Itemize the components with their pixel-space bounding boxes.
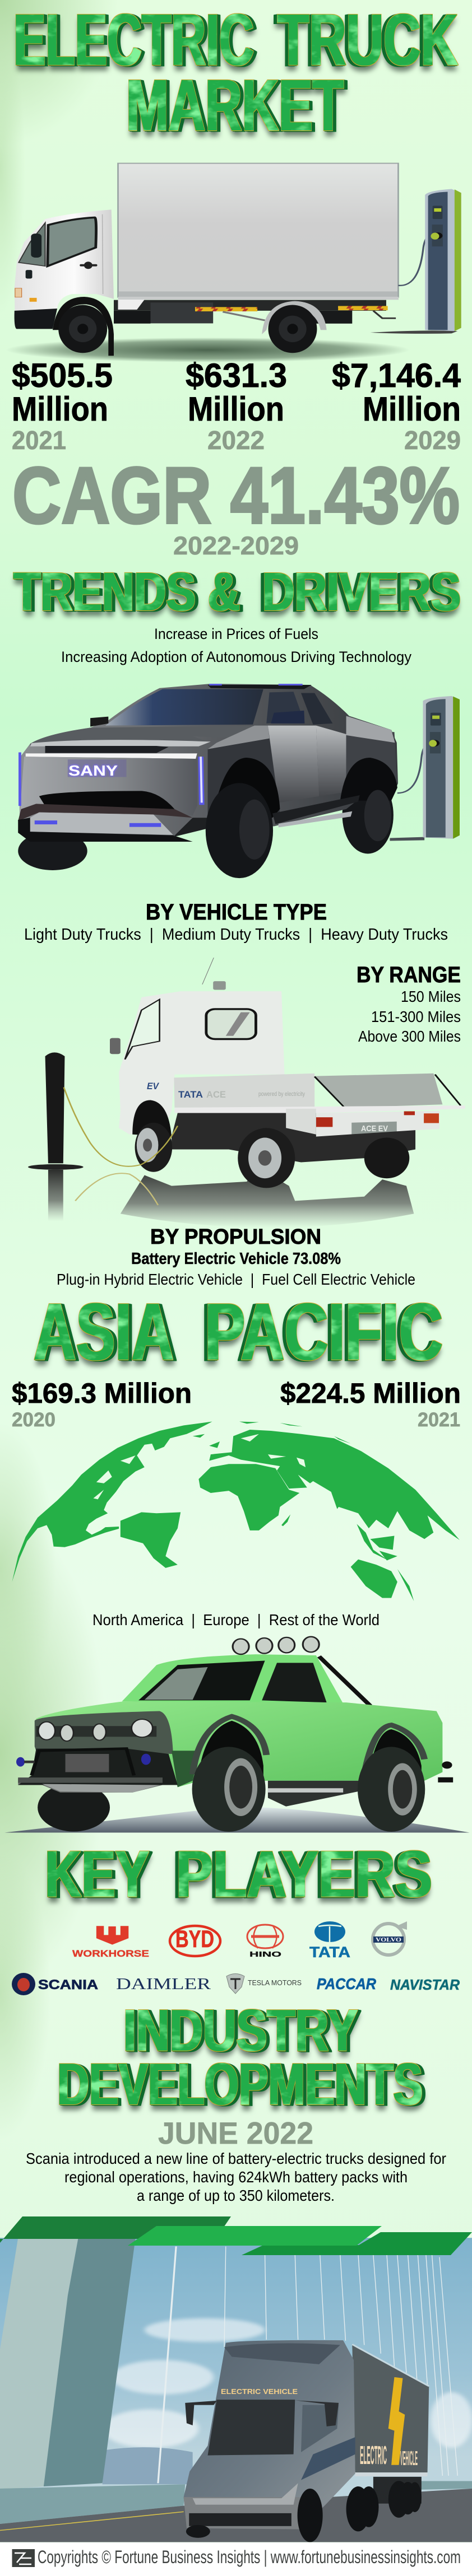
stat: 2021 market size: Million (12, 390, 108, 428)
stat: asia pacific 2020 (12, 1378, 192, 1431)
logo: Navistar: NAVISTAR (390, 1976, 460, 1993)
segment: by propulsion: Plug-in Hybrid Electric Vehicle | Fuel Cell Electric Vehicle (57, 1271, 415, 1288)
logo: Tata: TATA (309, 1944, 350, 1961)
truck lettering (221, 2387, 418, 2470)
CAGR callout: 2022-2029 (173, 531, 299, 560)
segment: by vehicle type: Light Duty Trucks | Medium Duty Trucks | Heavy Duty Trucks (24, 926, 448, 944)
vehicle decals: ACE EV (361, 1124, 388, 1133)
logo: Workhorse (72, 1926, 149, 1959)
segment: by range: 151-300 Miles (371, 1008, 461, 1025)
segment: by range: Above 300 Miles (358, 1028, 461, 1045)
stat: asia pacific 2020: 2020 (12, 1409, 55, 1431)
title (13, 0, 458, 146)
segment: by vehicle type (24, 900, 448, 944)
logo: Workhorse: WORKHORSE (72, 1948, 149, 1959)
title: MARKET (126, 64, 344, 146)
stat: 2022 market size: $631.3 (186, 357, 287, 394)
stat: 2021 market size: 2021 (12, 426, 66, 455)
truck lettering: ELECTRIC VEHICLE (221, 2387, 298, 2396)
text block: development description: regional operations, having 624kWh battery packs with (64, 2168, 408, 2186)
heading: trends and drivers (13, 561, 461, 622)
logo: Tata (309, 1921, 350, 1961)
vehicle decals (147, 1081, 388, 1133)
logo: Volvo: VOLVO (376, 1937, 401, 1943)
logo: Volvo (373, 1921, 407, 1955)
stat: asia pacific 2021 (280, 1378, 461, 1431)
heading: key players (45, 1837, 432, 1911)
logo: Scania (12, 1973, 98, 1995)
date: June 2022: JUNE 2022 (158, 2116, 313, 2150)
vehicle decals: EV (147, 1081, 160, 1091)
logo: Tesla Motors: TESLA MOTORS (248, 1978, 302, 1987)
photo panel: electric semi truck on bridge (0, 2238, 472, 2542)
footer bar (0, 2542, 472, 2576)
segment: by range: BY RANGE (357, 963, 461, 987)
stat: asia pacific 2021: $224.5 Million (280, 1378, 461, 1409)
stat: 2029 market size: Million (363, 390, 461, 428)
stat: asia pacific 2020: $169.3 Million (12, 1378, 192, 1409)
heading: asia pacific (34, 1286, 443, 1377)
illustration: green electric pickup (4, 1637, 470, 1832)
segment: by propulsion: Battery Electric Vehicle 73.08% (131, 1250, 341, 1268)
illustration: Tata Ace EV with charging post (28, 958, 465, 1228)
title: ELECTRIC (13, 0, 254, 81)
stat: asia pacific 2021: 2021 (418, 1409, 460, 1431)
stat: 2022 market size (186, 357, 287, 455)
heading: asia pacific: ASIA (34, 1286, 174, 1377)
segment: by propulsion: BY PROPULSION (150, 1225, 321, 1249)
heading: key players: KEY (45, 1837, 149, 1911)
stat: 2029 market size: 2029 (404, 426, 461, 455)
SANY badge: SANY (68, 762, 118, 779)
logo: Scania: SCANIA (38, 1977, 98, 1992)
stat: 2029 market size: $7,146.4 (332, 357, 461, 394)
logo: Hino (247, 1925, 283, 1958)
text block: drivers: Increasing Adoption of Autonomous Driving Technology (61, 648, 411, 665)
logo: Paccar: PACCAR (317, 1975, 377, 1992)
text block: drivers (61, 626, 411, 665)
stat: 2021 market size (12, 357, 113, 455)
text: other regions: North America | Europe | Rest of the World (92, 1611, 380, 1628)
footer logo (12, 2549, 35, 2567)
logo: Tesla Motors (226, 1973, 302, 1994)
heading: industry developments (57, 1998, 423, 2117)
vehicle decals: ACE (206, 1089, 226, 1100)
stat: 2029 market size (332, 357, 461, 455)
logo: Hino: HINO (249, 1950, 281, 1958)
logo: BYD: BYD (175, 1926, 214, 1953)
stat: 2022 market size: 2022 (207, 426, 265, 455)
stat: 2021 market size: $505.5 (12, 357, 113, 394)
illustration: SANY electric pickup with charger (18, 684, 460, 878)
segment: by range: 150 Miles (401, 988, 461, 1005)
heading: trends and drivers: TRENDS & (13, 561, 240, 622)
text block: development description: a range of up to 350 kilometers. (137, 2187, 335, 2204)
heading: industry developments: INDUSTRY (123, 1998, 358, 2064)
text block: development description (26, 2150, 446, 2204)
stat: 2022 market size: Million (188, 390, 284, 428)
world map (12, 1422, 460, 1601)
segment: by propulsion (57, 1225, 415, 1288)
segment: by vehicle type: BY VEHICLE TYPE (146, 900, 327, 925)
logo: Daimler: DAIMLER (116, 1975, 211, 1993)
decorative green bands (0, 2216, 472, 2255)
illustration: electric box truck with charger (6, 164, 461, 362)
vehicle decals: TATA (178, 1089, 203, 1100)
segment: by range (357, 963, 461, 1045)
vehicle decals: powered by electricity (258, 1091, 305, 1098)
text block: drivers: Increase in Prices of Fuels (154, 626, 318, 642)
